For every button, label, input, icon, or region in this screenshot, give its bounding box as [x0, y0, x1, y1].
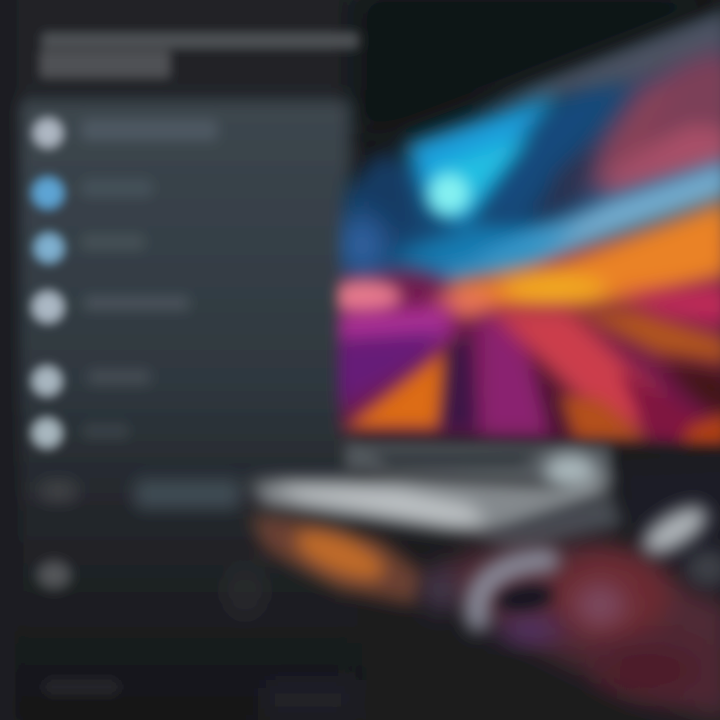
dark navy band: [503, 81, 622, 206]
bright cyan spot: [429, 174, 469, 214]
left dark blue swoosh: [359, 155, 411, 255]
desk bottom-left detail: [225, 562, 352, 720]
dark right desk area: [620, 465, 720, 600]
purple field: [330, 330, 450, 410]
magenta band: [335, 306, 450, 345]
text block: row 6 label: [84, 425, 128, 437]
light blue band: [480, 160, 720, 275]
icon: faded lower disc: [37, 561, 71, 589]
orange ray bottom left: [345, 335, 465, 428]
orange desk reflection: [250, 515, 425, 605]
heading: blurred title: [40, 33, 358, 78]
orange band: [450, 198, 720, 312]
icon: front mouse: [477, 560, 554, 620]
monitor screen artwork: [329, 6, 720, 445]
text block: bottom label: [44, 680, 119, 694]
lower blue swoosh: [390, 225, 560, 275]
icon: row 3 blue disc: [34, 233, 64, 263]
mousepad reflection: [424, 545, 720, 720]
pink salmon band: [329, 281, 401, 313]
top edge glow: [470, 6, 720, 110]
text block: row 3 label: [82, 235, 144, 249]
text block: row 1 label: [82, 120, 217, 140]
icon: row 6 disc: [32, 418, 62, 448]
keyboard: [250, 454, 625, 605]
icon: row 1 disc: [33, 118, 63, 148]
screen base: [340, 30, 720, 440]
icon: row 5 disc: [32, 366, 62, 396]
rays fan: [440, 330, 480, 430]
monitor stand: [345, 442, 615, 485]
text block: row 5 label: [88, 370, 150, 384]
icon: row 4 disc: [32, 291, 64, 323]
text block: row 4 label: [84, 296, 189, 310]
text block: lower label strip: [40, 480, 240, 508]
icon: right mouse: [636, 497, 720, 586]
yellow highlight: [503, 275, 607, 303]
icon: row 2 blue disc: [32, 177, 64, 209]
cyan triangle: [405, 92, 560, 225]
panel: left settings sidebar: [0, 0, 358, 720]
rose upper right wedge: [565, 50, 720, 195]
text block: row 2 label: [82, 180, 152, 196]
